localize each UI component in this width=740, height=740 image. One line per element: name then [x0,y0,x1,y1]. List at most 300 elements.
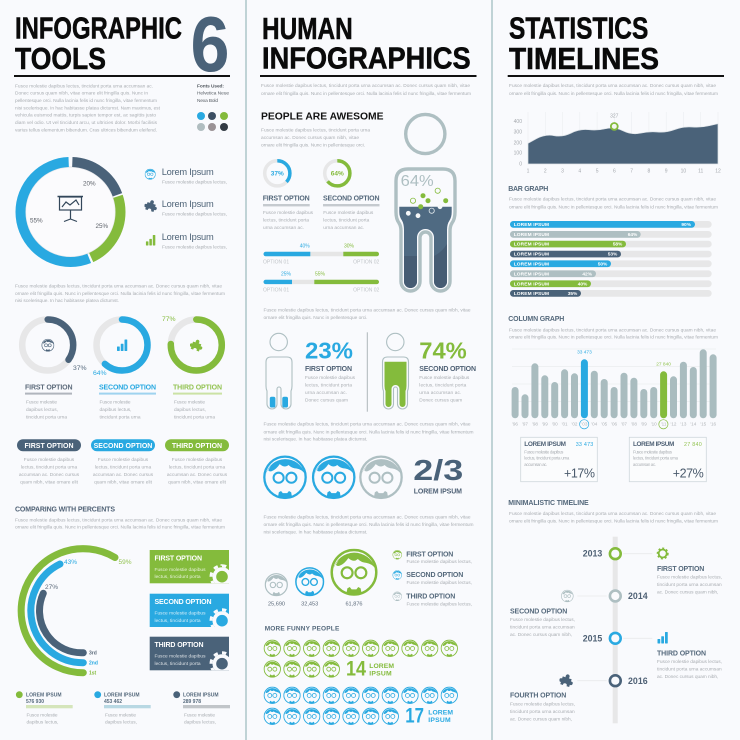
intro text: Donec cursus quam nibh, vitae ornare elit fringilla quis. Nunc in [15,91,148,97]
option box: first: Fusce molestie dapibus [154,567,206,573]
green owl grid: 14 [264,640,457,681]
column chart: '15 [700,422,707,427]
area chart: 7 [630,168,633,174]
text block: timeline: Fusce molestie dapibus lectus, tincidunt porta urna accumsan ac. Donec cursus quam nibh, vitae [509,511,716,517]
stat card: 27 840: Fusce molestie dapibus [633,450,672,454]
gauge: 64 percent [93,320,148,377]
icon: puzzle [143,198,159,213]
radial bar chart: 1st [89,670,97,676]
pill descriptions [19,457,228,486]
fonts used note: Nexa Bold [197,98,218,104]
stat: 23 percent first option: Fusce molestie dapibus [305,375,356,381]
intro text [15,83,161,134]
text block: sized owls intro [264,514,474,535]
timeline spine with nodes: 2016 [628,676,648,686]
option box: third: Fusce molestie dapibus [154,654,206,660]
fonts used note [197,83,229,104]
green owl grid: 14: 14 [346,658,366,681]
timeline item: first option [657,548,722,596]
stat: 74 percent second option: lectus, tincidunt porta [419,383,467,389]
split bar: 40 and 30 percent: 30% [344,244,355,250]
intro text: varius tellus elementum bibendum. Cras ultrices bibendum eleifend. [15,128,157,134]
column chart: '05 [601,422,608,427]
horizontal bar graph: 40% [578,281,588,287]
legend: lorem ipsum items [143,167,227,250]
column chart: '98 [532,422,538,427]
stat card: 33 473: LOREM IPSUM [524,441,566,448]
text block: figures intro: ornare elit fringilla quis. Nunc in pellentesque orci. [264,315,368,321]
owl legend: THIRD OPTION [406,593,455,600]
gauge: 77 percent [162,316,222,370]
pill descriptions: Fusce molestie dapibus [24,457,75,463]
column chart: 27 840 [656,362,671,368]
column: human infographics [260,12,476,728]
fonts used note: Fonts Used: [197,83,224,89]
intro text [261,83,471,97]
horizontal bar graph: 50% [598,261,608,267]
timeline item: third option: Fusce molestie dapibus lectus, [657,659,722,665]
title: infographic tools: TOOLS [15,42,106,76]
title: infographic tools [15,12,182,76]
text block: figures intro: Fusce molestie dapibus lectus, tincidunt porta urna accumsan ac. Donec cursus quam nibh, vitae [264,308,471,314]
stat card: 27 840: 27 840 [684,442,702,448]
timeline item: third option: THIRD OPTION [657,650,706,657]
area chart: 400 [514,119,522,125]
text block: bar graph: Fusce molestie dapibus lectus, tincidunt porta urna accumsan ac. Donec cursus quam nibh, vitae [509,197,716,203]
owl legend: Fusce molestie dapibus lectus, [406,580,472,586]
first and second option text: lectus, tincidunt porta [263,217,309,223]
green owl grid: 14: LOREM [369,663,394,670]
text block: comparing: ornare elit fringilla quis. Nunc in pellentesque orci. Nulla lacinia felis id nunc fringilla, vitae fermentum [15,525,225,531]
stat: 23 percent first option: urna accumsan ac. [305,390,347,396]
bottom stats legend: LOREM IPSUM [104,692,140,698]
area chart: 327 [610,114,619,120]
option box: second: lectus, tincidunt porta [154,618,201,624]
timeline item: second option: tincidunt porta urna accumsan [510,624,575,630]
timeline spine with nodes [577,537,652,723]
text block: comparing [15,517,225,531]
small human figure 74 percent [382,333,408,409]
column chart: '14 [690,422,697,427]
heading: more funny people: MORE FUNNY PEOPLE [265,625,340,632]
column chart: '07 [621,422,627,427]
option box: second: Fusce molestie dapibus [154,610,206,616]
text block: owls intro [264,422,474,443]
first and second option text: lectus, tincidunt porta [323,217,370,223]
option box: first: lectus, tincidunt porta [154,574,201,580]
intro text: Fusce molestie dapibus lectus, tincidunt porta urna accumsan ac. [15,83,153,89]
column chart: '11 [661,422,667,427]
sized owls with counts: 25,690 [268,602,285,608]
timeline item: first option: FIRST OPTION [657,566,704,573]
title: infographic tools: INFOGRAPHIC [15,12,182,46]
small gauge: 64 percent: 64% [331,171,344,178]
timeline item: fourth option: FOURTH OPTION [510,693,566,700]
heading: column graph: COLUMN GRAPH [508,316,564,323]
blue owl grid: 17: IPSUM [428,717,451,724]
timeline item: third option [657,632,722,680]
option descriptions: Fusce molestie [174,400,205,406]
large human figure 64 percent [396,114,455,291]
horizontal bar graph: 53% [608,252,618,258]
column chart: '06 [611,422,618,427]
horizontal bar graph: 42% [582,271,593,277]
horizontal bar graph: LOREM IPSUM [514,281,549,287]
column chart: '12 [670,422,677,427]
option headings with underline [25,384,222,395]
option descriptions: dapibus lectus, [26,407,58,413]
text block: timeline [509,511,718,524]
horizontal bar graph: LOREM IPSUM [514,291,549,297]
icon: bars [658,632,668,644]
option descriptions: tincidunt porta urna [174,414,215,420]
area chart: 5 [596,168,599,174]
pill descriptions: quam nibh, vitae ornare elit [168,480,227,486]
column: infographic tools [14,0,233,726]
text block: bar graph: ornare elit fringilla quis. Nunc in pellentesque orci. Nulla lacinia felis id nunc fringilla, vitae fermentum [509,204,718,210]
title: human infographics: HUMAN [262,12,353,46]
legend: lorem ipsum items: Fusce molestie dapibus lectus, [162,212,227,218]
split bar: 25 and 55 percent [263,271,380,294]
title: statistics timelines [509,11,659,76]
option descriptions: tincidunt porta urna [100,414,141,420]
text block: people [261,128,370,149]
stat: 74 percent second option: urna accumsan ac. [419,390,461,396]
timeline item: fourth option: tincidunt porta urna accumsan [510,709,575,715]
timeline item: second option: Fusce molestie dapibus lectus, [510,617,575,623]
gauge: 37 percent: 37% [73,365,87,372]
first and second option text: FIRST OPTION [263,195,310,202]
stat: two thirds: 2/3 [413,455,463,487]
text block: sized owls intro: nisi scelerisque. In hac habitasse platea dictumst. [264,529,368,535]
owl legend [393,550,472,607]
big number 6: 6 [190,0,230,88]
area chart: 4 [578,168,581,174]
sized owls with counts: 61,876 [345,602,363,608]
text block: figures intro [264,308,471,321]
title: statistics timelines: STATISTICS [509,11,648,45]
bottom stats legend: 576 930 [26,699,44,705]
horizontal bar graph: 64% [628,232,638,238]
text block: bar graph [509,197,718,210]
split bar: 40 and 30 percent: 40% [300,244,310,250]
text block: donut intro: Fusce molestie dapibus lectus, tincidunt porta urna accumsan ac. Donec cursus quam nibh, vitae [15,284,222,290]
stat: 23 percent first option: lectus, tincidunt porta [305,383,352,389]
timeline item: first option: Fusce molestie dapibus lectus, [657,575,722,581]
bottom stats legend: LOREM IPSUM [183,692,218,698]
text block: column graph: ornare elit fringilla quis. Nunc in pellentesque orci. Nulla lacinia felis id nunc fringilla, vitae fermentum [509,335,718,341]
first and second option text [263,195,380,231]
stat: 74 percent second option [419,337,476,403]
bottom stats legend: Fusce molestie [184,712,215,718]
stat card: 33 473: 33 473 [576,442,593,448]
blue owl grid: 17: LOREM [428,709,453,716]
horizontal bar graph: LOREM IPSUM [514,222,549,228]
column: statistics timelines [508,11,724,723]
pill descriptions: lectus, tincidunt porta urna [21,465,77,471]
sized owls with counts: 32,453 [301,602,318,608]
stat card: 27 840: LOREM IPSUM [633,441,674,448]
fonts used note: Helvetica Neue [197,91,229,97]
bottom stats legend [16,691,230,726]
timeline spine with nodes: 2015 [583,634,602,644]
pill buttons [17,439,229,451]
text block: column graph: Fusce molestie dapibus lectus, tincidunt porta urna accumsan ac. Donec cursus quam nibh, vitae [509,327,716,333]
area chart: 12 [715,168,721,174]
split bar: 25 and 55 percent: 55% [315,271,326,277]
bottom stats legend: dapibus lectus, [26,720,58,726]
area chart: 1 [527,168,530,174]
intro text: Fusce molestie dapibus lectus, tincidunt porta urna accumsan ac. Donec cursus quam nibh, vitae [261,83,470,89]
option descriptions: Fusce molestie [100,400,131,406]
legend: lorem ipsum items: Lorem Ipsum [162,199,214,209]
small gauge: 37 percent [265,161,290,186]
owl faces two of three [264,457,402,498]
intro text: diam vel odio. Ut vel tincidunt arcu, ut ultricies dolor. Morbi facilisis [15,120,158,126]
stat card: 33 473: +17% [564,467,595,481]
column chart: '13 [680,422,687,427]
icon: owl [561,590,573,602]
option descriptions: dapibus lectus, [100,407,132,413]
radial bar chart: 27% [45,584,58,591]
area chart: 11 [698,168,704,174]
text block: owls intro: Fusce molestie dapibus lectus, tincidunt porta urna accumsan ac. Donec cursus quam nibh, vitae [264,422,471,428]
text block: people: accumsan ac. Donec cursus quam nibh, vitae [261,135,359,141]
bottom stats legend: dapibus lectus, [184,720,216,726]
column chart: '16 [710,422,717,427]
column chart: '96 [512,422,518,427]
option headings with underline: SECOND OPTION [99,384,156,391]
green owl grid: 14: IPSUM [369,670,392,677]
pill buttons: THIRD OPTION [172,443,222,450]
split bar: 25 and 55 percent: 25% [281,271,292,277]
stat card: 27 840: lectus, tincidunt porta urna [633,456,679,461]
stat: 74 percent second option: 74% [419,337,467,363]
stat: 23 percent first option [305,337,356,403]
intro text: Fusce molestie dapibus lectus, tincidunt porta urna accumsan ac. Donec cursus quam nibh, vitae [509,83,716,89]
legend: lorem ipsum items: Fusce molestie dapibus lectus, [162,180,227,186]
option descriptions: dapibus lectus, [174,407,206,413]
timeline spine with nodes: 2014 [628,591,648,601]
blue owl grid: 17: 17 [405,705,424,728]
owl legend: Fusce molestie dapibus lectus, [406,601,472,607]
option headings with underline: THIRD OPTION [173,384,222,391]
column chart: '02 [572,422,578,427]
intro text: ornare elit fringilla quis. Nunc in pellentesque orci. Nulla lacinia felis id nunc fringilla, vitae fermentum [509,91,718,97]
stat: two thirds [413,455,463,495]
area chart: 0 [519,161,522,167]
title: human infographics [262,12,471,76]
bottom stats legend: LOREM IPSUM [26,692,62,698]
stat: two thirds: LOREM IPSUM [414,488,462,495]
bottom stats legend: 453 462 [104,699,122,705]
icon: bars [146,235,155,246]
stat card: 33 473: lectus, tincidunt porta urna [524,456,570,461]
pill buttons: SECOND OPTION [94,443,152,450]
icon: owl [145,169,155,179]
donut chart: 55% [30,218,43,224]
heading: people are awesome: PEOPLE ARE AWESOME [261,111,384,122]
text block: owls intro: nisi scelerisque. In hac habitasse platea dictumst. [264,437,368,443]
first and second option text: urna accumsan ac. [323,225,364,231]
donut chart [20,162,120,262]
owl legend: Fusce molestie dapibus lectus, [406,559,472,565]
option box: first [150,550,229,584]
area chart: 8 [648,168,651,174]
area chart: 300 [514,130,522,136]
column chart: '01 [562,422,568,427]
small human figure 23 percent [266,333,292,409]
bottom stats legend: Fusce molestie [105,712,136,718]
legend: lorem ipsum items: Lorem Ipsum [162,232,214,242]
title: human infographics: INFOGRAPHICS [262,42,471,76]
first and second option text: urna accumsan ac. [263,225,304,231]
first and second option text: Fusce molestie dapibus [323,210,374,216]
column chart: '03 [581,422,588,427]
donut chart: 25% [96,223,109,230]
legend: lorem ipsum items: Fusce molestie dapibus lectus, [162,244,227,250]
horizontal bar graph: LOREM IPSUM [514,261,549,267]
timeline item: fourth option [510,672,575,722]
pill descriptions: lectus, tincidunt porta urna [169,465,225,471]
blue owl grid: 17 [264,687,457,728]
stat: 74 percent second option: Fusce molestie dapibus [419,375,470,381]
area chart [514,112,721,174]
bottom stats legend: 289 978 [183,699,201,705]
donut chart: 20% [83,180,96,188]
stat card: 27 840: +27% [673,467,704,481]
option descriptions: tincidunt porta urna [26,414,67,420]
text block: people: Fusce molestie dapibus lectus, tincidunt porta urna [261,128,370,134]
pill descriptions: lectus, tincidunt porta urna [95,465,151,471]
horizontal bar graph: 35% [568,291,578,297]
heading: comparing with percents: COMPARING WITH PERCENTS [15,506,115,513]
intro text: nisi scelerisque. In hac habitasse platea dictumst. Nam maximus, est [15,105,161,111]
bottom stats legend: dapibus lectus, [105,720,137,726]
area chart: 100 [514,151,522,157]
split bar: 40 and 30 percent [263,244,380,266]
timeline item: first option: ac. Donec cursus quam nibh, [657,590,718,596]
column chart: '99 [542,422,548,427]
timeline item: second option: SECOND OPTION [510,608,567,615]
horizontal bar graph: LOREM IPSUM [514,232,549,238]
option box: second: SECOND OPTION [154,599,212,606]
stat: 74 percent second option: Donec cursus quam [419,397,462,403]
small gauge: 37 percent: 37% [271,171,284,178]
text block: column graph [509,327,718,341]
column chart: '10 [651,422,657,427]
timeline item: third option: ac. Donec cursus quam nibh, [657,674,718,680]
heading: bar graph: BAR GRAPH [508,186,548,193]
pill descriptions: Fusce molestie dapibus [172,457,223,463]
radial bar chart: 43% [64,559,77,566]
intro text [509,83,718,97]
gauge: 37 percent [22,320,87,372]
area chart: 6 [613,168,616,174]
timeline item: fourth option: Fusce molestie dapibus lectus, [510,701,575,707]
timeline spine with nodes: 2013 [583,549,602,559]
column chart [512,349,717,429]
text block: timeline: ornare elit fringilla quis. Nunc in pellentesque orci. Nulla lacinia felis id nunc fringilla, vitae fermentum [509,518,718,524]
stat card: 27 840: accumsan ac. [633,462,656,467]
option box: first: FIRST OPTION [154,555,202,562]
column chart: '00 [552,422,558,427]
pill descriptions: accumsan ac. Donec cursus [167,472,228,478]
split bar: 25 and 55 percent: OPTION 01 [263,288,289,294]
column chart: '97 [522,422,528,427]
stat card: 33 473: Fusce molestie dapibus [524,450,563,454]
bottom stats legend: Fusce molestie [26,712,58,718]
text block: sized owls intro: ornare elit fringilla quis. Nunc in pellentesque orci. Nulla lacinia felis id nunc fringilla, vitae fermentum [264,522,474,528]
pill descriptions: accumsan ac. Donec cursus [93,472,154,478]
timeline item: third option: tincidunt porta urna accumsan [657,667,722,673]
text block: donut intro: ornare elit fringilla quis. Nunc in pellentesque orci. Nulla lacinia felis id nunc fringilla, vitae fermentum [15,291,225,297]
area chart: 2 [544,168,547,174]
horizontal bar graph: 90% [681,222,692,228]
pill descriptions: accumsan ac. Donec cursus [19,472,80,478]
column chart: '04 [591,422,598,427]
icon: presentation board [58,196,83,222]
horizontal bar graph: 58% [613,242,623,248]
icon: puzzle [558,672,575,688]
radial bar chart [21,549,132,676]
pill descriptions: Fusce molestie dapibus [98,457,149,463]
area chart: 10 [681,168,686,174]
stat card: 33 473: accumsan ac. [524,462,547,467]
timeline item: fourth option: ac. Donec cursus quam nibh, [510,716,572,722]
text block: comparing: Fusce molestie dapibus lectus, tincidunt porta urna accumsan ac. Donec cursus quam nibh, vitae [15,517,222,523]
title: statistics timelines: TIMELINES [509,42,659,76]
option box: third [150,636,229,670]
first and second option text: SECOND OPTION [323,195,380,202]
option descriptions [26,400,215,420]
stat: 23 percent first option: Donec cursus quam [305,397,348,403]
gauge: 64 percent: 64% [93,370,107,377]
horizontal bar graph [510,221,712,297]
column chart: '09 [641,422,647,427]
timeline item: first option: tincidunt porta urna accumsan [657,582,722,588]
horizontal bar graph: LOREM IPSUM [514,271,549,277]
text block: sized owls intro: Fusce molestie dapibus lectus, tincidunt porta urna accumsan ac. Donec cursus quam nibh, vitae [264,514,471,520]
column chart: '08 [631,422,637,427]
pill buttons: FIRST OPTION [24,443,74,450]
split bar: 25 and 55 percent: OPTION 02 [353,288,380,294]
area chart: 200 [514,140,522,146]
timeline item: second option [510,590,575,638]
text block: people: ornare elit fringilla quis. Nunc in pellentesque orci. [261,143,365,149]
pill descriptions: quam nibh, vitae ornare elit [94,480,153,486]
first and second option text: Fusce molestie dapibus [263,210,314,216]
split bar: 40 and 30 percent: OPTION 01 [263,260,289,266]
text block: donut intro [15,284,225,304]
area chart: 9 [665,168,668,174]
intro text: vehicula euismod mattis, turpis sapien tempor est, ac sagittis justo [15,113,156,119]
area chart: 3 [561,168,564,174]
legend: lorem ipsum items: Lorem Ipsum [162,167,214,177]
stat card: 33 473 [521,437,597,482]
large human figure 64 percent: 64% [401,173,434,190]
gauge: 77 percent: 77% [162,316,176,323]
option headings with underline: FIRST OPTION [25,384,72,391]
heading: minimalistic timeline: MINIMALISTIC TIMELINE [508,500,589,507]
text block: owls intro: ornare elit fringilla quis. Nunc in pellentesque orci. Nulla lacinia felis id nunc fringilla, vitae fermentum [264,429,474,435]
owl legend: SECOND OPTION [406,572,463,579]
sized owls with counts [265,550,376,608]
owl legend: FIRST OPTION [406,552,453,559]
pill descriptions: quam nibh, vitae ornare elit [20,480,79,486]
intro text: ornare elit fringilla quis. Nunc in pellentesque orci. Nulla lacinia felis id nunc fringilla, vitae fermentum [261,91,471,97]
horizontal bar graph: LOREM IPSUM [514,252,549,258]
